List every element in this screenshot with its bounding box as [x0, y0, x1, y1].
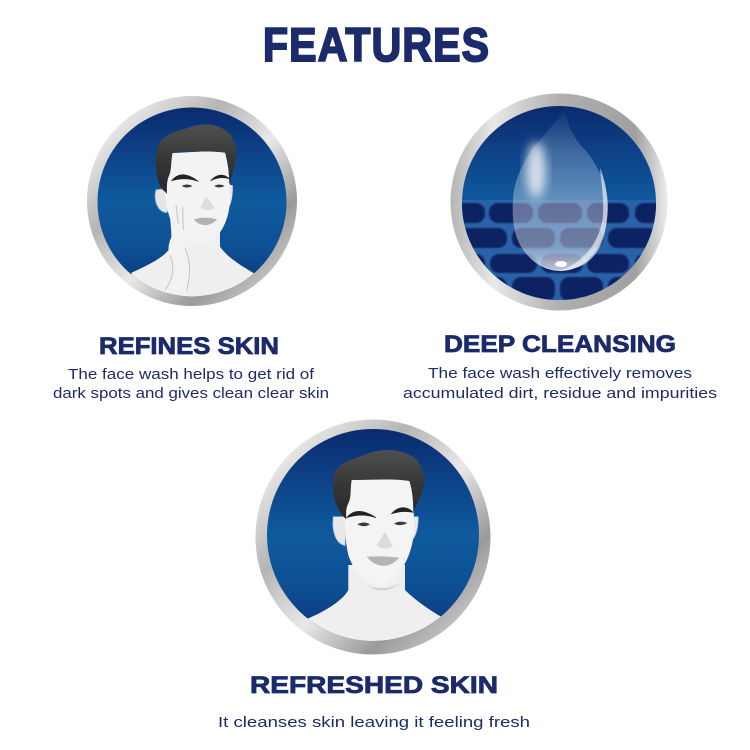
panel: refreshed skin	[218, 420, 530, 731]
icon: water drop on skin cells	[445, 94, 668, 310]
heading: REFINES SKIN	[99, 333, 279, 360]
panel: deep cleansing	[403, 94, 717, 402]
text block: accumulated dirt, residue and impurities	[403, 386, 717, 402]
heading: REFRESHED SKIN	[250, 672, 498, 699]
text block: The face wash effectively removes	[428, 366, 692, 382]
text block: It cleanses skin leaving it feeling fresh	[218, 715, 530, 731]
text block: dark spots and gives clean clear skin	[53, 386, 329, 402]
title: FEATURES	[263, 19, 489, 72]
text block: The face wash helps to get rid of	[68, 367, 315, 383]
text block	[403, 366, 717, 402]
icon: man touching cheek	[87, 96, 297, 306]
icon: smiling man	[256, 420, 490, 654]
panel: refines skin	[53, 96, 329, 402]
water drop	[513, 108, 608, 271]
heading: DEEP CLEANSING	[444, 331, 676, 358]
text block	[53, 367, 329, 402]
